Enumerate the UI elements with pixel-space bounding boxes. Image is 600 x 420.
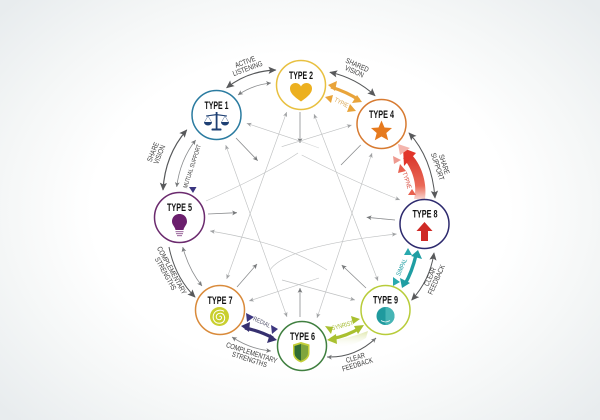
outer arrow: complementary strengths bottom: COMPLEMENTARY [225, 342, 278, 366]
outer arrow: clear feedback right: CLEAR [423, 266, 438, 288]
outer arrow: clear feedback bottom: FEEDBACK [341, 357, 374, 374]
outer arrow: shared vision: VISION [343, 65, 365, 80]
icon: spiral [210, 307, 229, 326]
node: type 8: TYPE 8 [412, 208, 438, 220]
icon: light bulb [172, 214, 187, 236]
outer arrow: shared support [409, 133, 452, 198]
type 7 to type 6 purple arrow [241, 313, 278, 343]
icon: teal smile circle [376, 307, 394, 325]
outer arrow: shared support: SHARE [437, 154, 450, 176]
node: type 2: TYPE 2 [289, 70, 313, 82]
type 6 to type 9 green arrow [325, 316, 368, 348]
outer arrow: clear feedback bottom: CLEAR [345, 352, 366, 365]
node: type 1 [192, 90, 241, 140]
node: type 6 [278, 322, 326, 370]
node: type 5 [154, 192, 204, 242]
type 8 to type 9 teal arrow [393, 248, 422, 288]
type 8 to type 9 teal arrow: SIMPAL [396, 257, 410, 277]
outer arrow: complementary strengths bottom [223, 337, 278, 372]
outer arrow: clear feedback bottom [327, 338, 376, 374]
type 2 to type 4 orange arrow [325, 81, 362, 112]
outer arrow: shared vision left [146, 130, 196, 190]
type 2 to type 4 orange arrow: TYPIE [333, 97, 349, 110]
icon: heart [290, 83, 312, 102]
node: type 4 [357, 100, 406, 148]
node: type 2 [276, 60, 326, 110]
outer arrow: complementary strengths bottom: STRENGTHS [231, 351, 268, 370]
icon: up arrow [416, 222, 432, 241]
type 8 to type 4 red arrow [393, 144, 425, 199]
mutual support label: MUTUAL SUPPORT [183, 144, 203, 189]
inner connection lines [206, 112, 400, 318]
node: type 7 [196, 286, 244, 334]
outer arrow: clear feedback right: FEEDBACK [427, 263, 447, 296]
outer arrow: active listening: ACTIVE [234, 55, 257, 70]
type 6 to type 9 green arrow: SYNRIST [331, 320, 355, 332]
outer arrow: shared vision [330, 57, 375, 96]
outer arrow: complementary strengths left: STRENGTHS [153, 256, 177, 292]
node: type 1: TYPE 1 [204, 100, 228, 112]
outer arrow: shared support: SUPPORT [429, 152, 445, 181]
outer arrow: shared vision left: VISION [153, 144, 168, 166]
outer arrow: active listening: LISTENING [232, 60, 264, 78]
node: type 6: TYPE 6 [290, 331, 315, 343]
type 8 to type 4 red arrow: TYPNE [400, 172, 412, 190]
type 7 to type 6 purple arrow: REDIAL [252, 316, 272, 330]
node: type 5: TYPE 5 [167, 202, 192, 214]
outer arrow: shared vision: SHARED [344, 57, 370, 74]
node: type 9: TYPE 9 [373, 294, 398, 306]
outer arrow: complementary strengths left: COMPLEMENTARY [155, 246, 188, 296]
icon: shield [293, 342, 310, 362]
outer arrow: shared vision left: SHARE [146, 141, 161, 163]
icon: star [371, 120, 392, 140]
outer arrow: complementary strengths left [149, 246, 202, 300]
node: type 4: TYPE 4 [369, 109, 395, 121]
node: type 8 [400, 200, 449, 248]
outer arrow: clear feedback right [412, 253, 447, 300]
node: type 9 [361, 286, 410, 334]
node: type 7: TYPE 7 [208, 295, 232, 307]
outer arrow: active listening [227, 54, 276, 95]
icon: scales [204, 112, 229, 130]
